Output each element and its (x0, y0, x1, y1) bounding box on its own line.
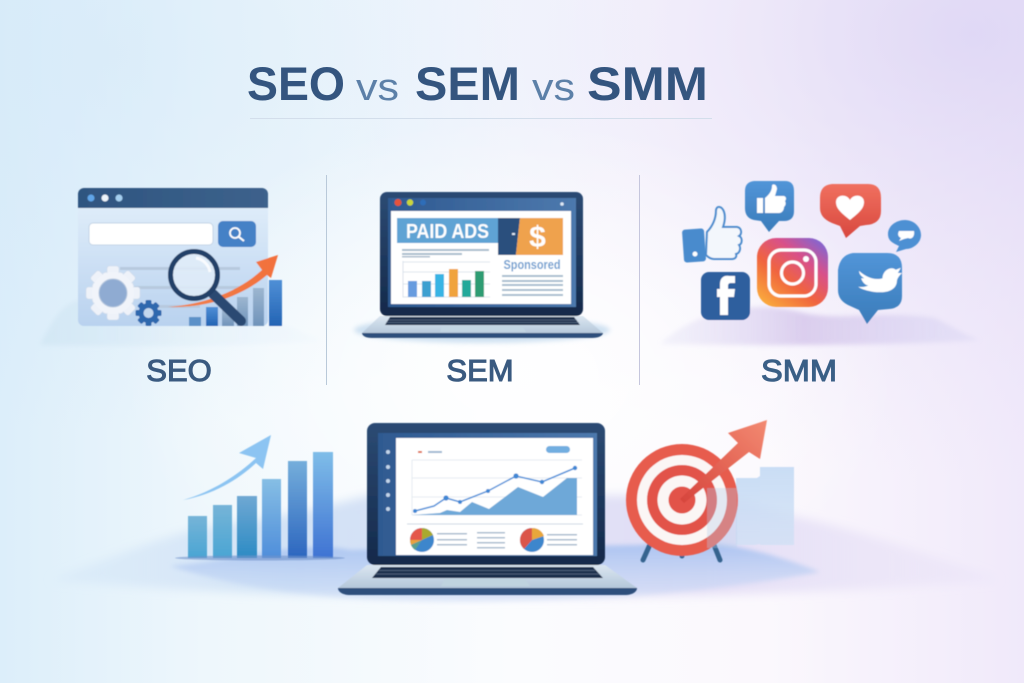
laptop base (362, 316, 603, 338)
text lines (402, 249, 489, 258)
bottom background waves (50, 492, 1000, 602)
chart shadow (175, 556, 345, 560)
target (626, 444, 738, 556)
laptop lid (380, 192, 583, 316)
text lines (502, 275, 563, 296)
arrow: growth (183, 435, 271, 500)
laptop screen (378, 433, 597, 556)
dollar ad tile: $ (529, 221, 546, 254)
SEO ground wave (40, 300, 325, 346)
arrow: target (680, 420, 767, 503)
icon: thumbs up (682, 207, 742, 263)
search box (89, 223, 213, 245)
panel: SMM (660, 181, 980, 345)
title: vs (356, 67, 399, 109)
title: SEO (247, 57, 345, 110)
label: SEO: SEO (146, 353, 212, 388)
search button (218, 221, 256, 247)
title (247, 57, 708, 110)
laptop screen (388, 198, 576, 307)
panel: analytics laptop (338, 423, 637, 595)
SMM ground wave (660, 307, 980, 345)
panel: SEO (40, 188, 325, 346)
icon: comment bubble (888, 220, 921, 252)
growth bars (188, 452, 333, 558)
title: vs (532, 67, 575, 109)
panel: target (626, 420, 794, 560)
pie chart (410, 528, 434, 552)
icon: instagram (757, 238, 828, 307)
legend lines (437, 532, 577, 548)
icon: twitter bubble (838, 253, 902, 324)
icon: small gear (136, 300, 162, 326)
target legs (643, 540, 720, 560)
dollar ad tile (498, 218, 563, 255)
label: SMM: SMM (761, 353, 837, 388)
title: SEM (415, 57, 520, 110)
icon: facebook (701, 272, 750, 320)
paid ads banner: PAID ADS (406, 220, 489, 243)
sem bar chart (403, 261, 490, 297)
icon: magnifier (170, 252, 241, 321)
laptop lid (367, 423, 605, 565)
panel: growth chart (175, 435, 345, 560)
icon: heart bubble (820, 184, 881, 238)
laptop base (338, 565, 637, 595)
icon: like bubble (745, 181, 794, 232)
arrow: growth (168, 255, 278, 307)
icon: gear (86, 266, 140, 320)
ghost bars (736, 467, 794, 545)
bar chart (189, 280, 282, 326)
sponsored label: Sponsored (504, 257, 561, 272)
panel: SEM (354, 192, 610, 343)
pie chart (520, 528, 544, 552)
browser window (78, 188, 268, 326)
label: SEM: SEM (446, 353, 514, 388)
title: SMM (587, 57, 708, 110)
area and line chart (407, 460, 583, 524)
SEM ground shadow (354, 317, 610, 343)
